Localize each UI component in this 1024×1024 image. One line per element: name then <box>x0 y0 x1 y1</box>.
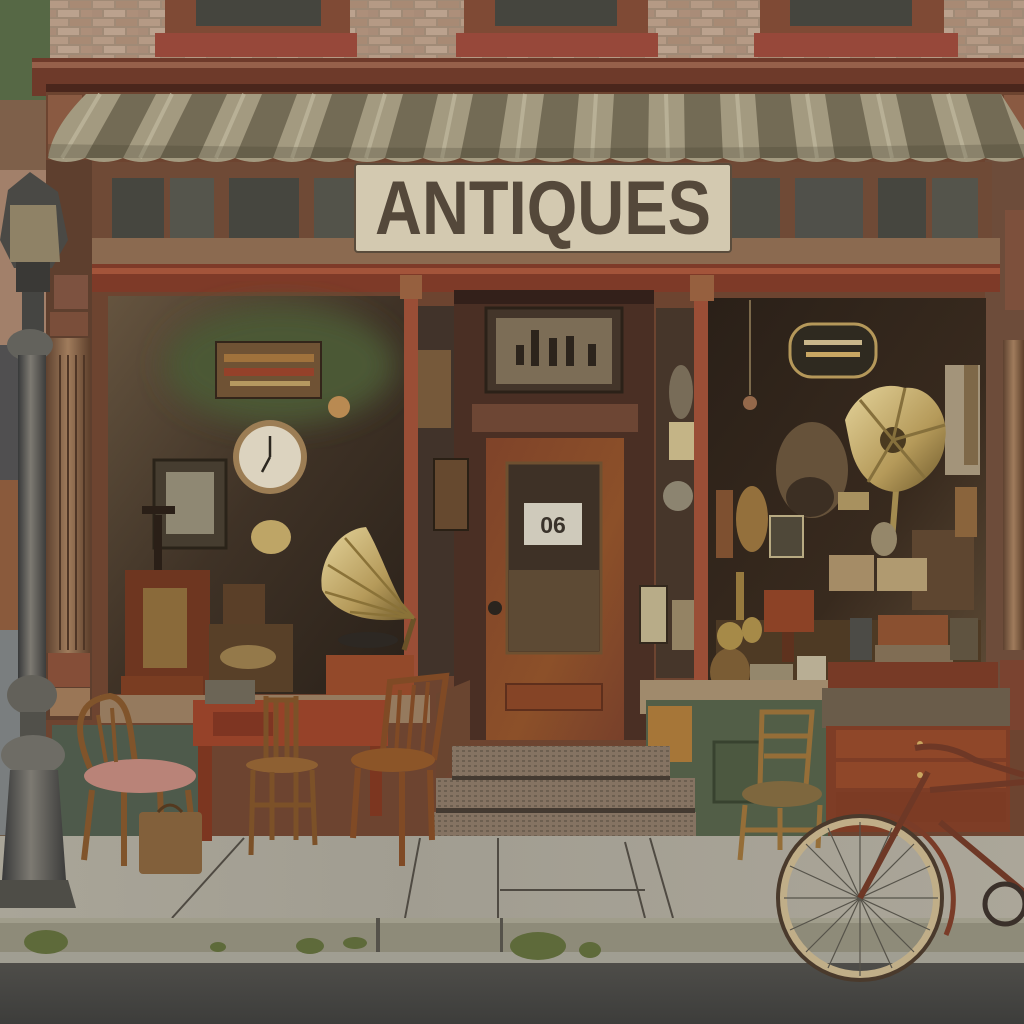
chair with cushion <box>80 696 196 866</box>
entrance steps <box>433 746 696 838</box>
central recess and door <box>454 290 654 740</box>
spindle chair <box>351 676 446 866</box>
door panel <box>506 684 602 710</box>
road <box>0 963 1024 1024</box>
stall risers <box>100 680 830 836</box>
middle stool chair <box>246 696 318 855</box>
shop facade base <box>46 92 1024 842</box>
curb <box>0 918 1024 964</box>
framed picture <box>154 460 226 548</box>
left corner post <box>400 275 422 681</box>
small frame and label cluster <box>663 365 869 557</box>
right corner post <box>690 275 714 695</box>
shelf frames <box>829 487 977 610</box>
wall clock <box>233 420 307 494</box>
right pillar <box>985 160 1024 730</box>
door number <box>524 503 582 545</box>
small gold plate <box>251 520 291 554</box>
oval hanging sign <box>790 324 876 377</box>
suitcase <box>139 805 202 874</box>
door number: 06 <box>540 512 566 538</box>
left window items <box>121 342 468 697</box>
right desk cabinet <box>822 662 1010 832</box>
door handle <box>488 601 502 615</box>
grass tufts <box>24 930 601 960</box>
right display window <box>656 298 986 700</box>
hanging frame on glass <box>434 459 468 530</box>
right window items <box>640 300 978 696</box>
upper brick wall <box>50 0 1024 60</box>
striped awning <box>48 94 1024 162</box>
hanging sign <box>216 342 321 398</box>
cornice <box>32 58 1024 96</box>
brass objects <box>710 572 762 696</box>
left pedestal cabinet <box>121 510 210 696</box>
gramophone <box>321 527 414 697</box>
bicycle <box>778 746 1024 980</box>
pendant bob <box>743 396 757 410</box>
left display window <box>108 296 454 694</box>
pendant <box>749 300 751 395</box>
red pedestal <box>764 590 814 662</box>
side notice <box>418 350 451 428</box>
shop sign: ANTIQUES <box>375 166 711 251</box>
door glass <box>507 463 601 653</box>
transom windows <box>92 162 1000 292</box>
desk <box>193 680 388 841</box>
street lamp <box>0 172 76 908</box>
left pillar <box>46 160 200 837</box>
small chest <box>209 584 293 692</box>
framed old photograph <box>486 308 622 392</box>
dark horn <box>776 422 848 518</box>
wire birdcage <box>716 486 768 558</box>
small chest <box>850 615 978 663</box>
door <box>486 438 624 740</box>
sidewalk <box>0 836 1024 920</box>
lower frames <box>640 586 826 694</box>
right wooden chair <box>740 712 822 860</box>
brass fluted horn <box>845 386 946 556</box>
